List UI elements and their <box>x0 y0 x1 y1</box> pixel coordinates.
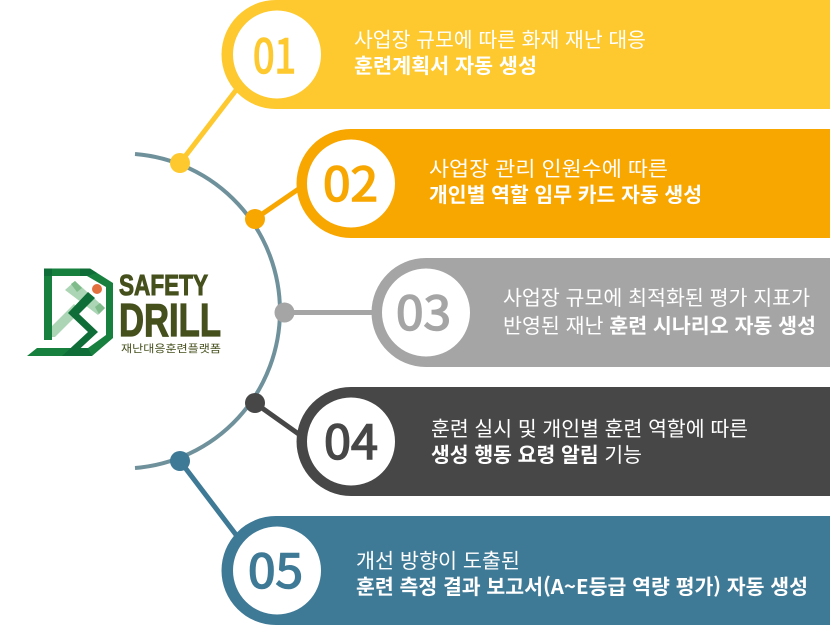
panel: item 05 <box>221 516 830 625</box>
logo wordmark <box>119 270 221 355</box>
connector 03 <box>274 302 375 322</box>
number badge 01: 01 <box>253 18 296 87</box>
connector 01 <box>170 85 240 173</box>
text block 05 bold: 훈련 측정 결과 보고서(A~E등급 역량 평가) 자동 생성 <box>356 570 808 600</box>
central arc <box>135 154 280 468</box>
text block 02: 사업장 관리 인원수에 따른 <box>429 152 668 182</box>
connector 04 <box>245 393 300 435</box>
text block 01 bold: 훈련계획서 자동 생성 <box>354 49 537 79</box>
text block 02 bold: 개인별 역할 임무 카드 자동 생성 <box>429 178 702 208</box>
number badge 03: 03 <box>396 275 451 344</box>
number badge 04 <box>307 398 395 486</box>
logo <box>27 268 221 356</box>
text block 01: 사업장 규모에 따른 화재 재난 대응 <box>354 23 646 53</box>
number badge 03 <box>382 268 470 356</box>
panel: item 03 <box>372 258 830 367</box>
text block 04 second line: 생성 행동 요령 알림 기능 <box>431 438 642 468</box>
logo head <box>92 284 102 294</box>
logo wordmark: SAFETY <box>119 270 208 302</box>
number badge 04: 04 <box>324 404 378 473</box>
logo runner medium accents <box>71 281 105 314</box>
logo wordmark: 재난대응훈련플랫폼 <box>121 342 221 355</box>
logo frame <box>27 268 113 356</box>
connector 02 <box>245 188 300 229</box>
number badge 02 <box>307 140 395 228</box>
number badge 02: 02 <box>323 146 378 215</box>
number badge 05: 05 <box>248 533 303 602</box>
panel: item 01 <box>222 0 830 109</box>
panel: item 04 <box>297 387 830 496</box>
number badge 05 <box>233 526 321 614</box>
number badge 01 <box>233 10 321 98</box>
logo wordmark: DRILL <box>119 294 221 346</box>
logo runner light strokes <box>52 304 81 337</box>
text block 05: 개선 방향이 도출된 <box>356 544 520 574</box>
logo runner dark strokes <box>62 292 98 356</box>
logo frame dark corners <box>44 268 97 356</box>
text block 03 second line: 반영된 재난 훈련 시나리오 자동 생성 <box>503 309 816 339</box>
panel: item 02 <box>296 129 830 238</box>
text block 04: 훈련 실시 및 개인별 훈련 역할에 따른 <box>431 412 748 442</box>
connector 05 <box>170 451 240 540</box>
text block 03: 사업장 규모에 최적화된 평가 지표가 <box>503 281 810 311</box>
